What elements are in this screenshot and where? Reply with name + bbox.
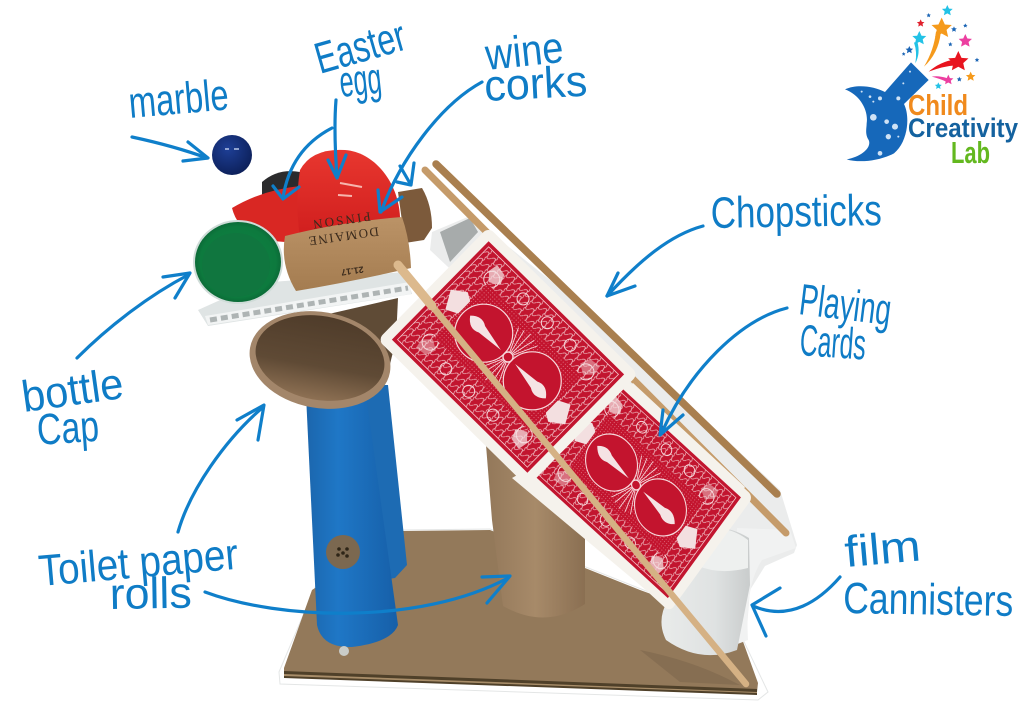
label: wine corks: corks <box>483 57 588 111</box>
blue tube: rear <box>350 385 407 582</box>
front chopstick <box>398 265 746 684</box>
front wine cork <box>284 208 411 291</box>
label: Chopsticks: Chopsticks <box>710 186 882 238</box>
front wine cork: PINSON <box>310 209 372 232</box>
arrow: Playing Cards <box>660 308 787 435</box>
label: bottle cap <box>19 359 126 455</box>
playing card: upper <box>378 227 638 487</box>
label: Toilet paper rolls <box>37 530 240 619</box>
label: Playing Cards: Playing <box>797 275 894 335</box>
label: Easter egg: egg <box>337 54 384 107</box>
front wine cork: DOMAINE <box>306 224 380 249</box>
label: Easter egg: Easter <box>309 11 411 84</box>
label: film Cannisters: film <box>843 522 923 577</box>
logo stars <box>902 5 979 89</box>
label: Toilet paper rolls: rolls <box>109 569 192 619</box>
arrows: wine corks <box>378 82 482 212</box>
logo flask <box>845 62 929 161</box>
cardboard base <box>279 529 768 700</box>
playing card: lower <box>512 358 753 612</box>
rear wine cork <box>398 188 432 243</box>
bottle cap <box>193 220 283 304</box>
arrow: bottle cap <box>77 273 190 358</box>
corrugated plastic shelf <box>198 272 412 326</box>
arrows: Easter egg <box>273 100 346 199</box>
marble <box>212 135 252 175</box>
arrows: Toilet paper rolls <box>178 405 510 613</box>
toilet paper roll: horizontal holder <box>242 298 398 420</box>
arrow: Chopsticks <box>607 226 703 296</box>
label: bottle cap: Cap <box>35 402 101 455</box>
label: Playing Cards: Cards <box>798 316 868 370</box>
label: Playing Cards <box>797 275 894 370</box>
label: wine corks <box>482 23 588 111</box>
logo: Child Creativity Lab <box>845 5 1018 170</box>
label: bottle cap: bottle <box>19 359 126 422</box>
arrow: marble <box>132 137 208 161</box>
label: marble: marble <box>127 70 230 128</box>
arrow: film Cannisters <box>752 577 840 636</box>
white plastic bracket <box>430 216 797 645</box>
label: wine corks: wine <box>482 23 566 80</box>
label: Toilet paper rolls: Toilet paper <box>37 530 240 596</box>
blue tube: front <box>306 395 398 656</box>
film cannister <box>661 527 750 655</box>
plastic easter egg <box>232 150 400 242</box>
rear chopsticks <box>425 164 786 533</box>
logo wordmark: Child: Child <box>908 90 968 122</box>
logo wordmark: Lab: Lab <box>951 135 990 170</box>
toilet paper roll: slanted support <box>486 445 585 618</box>
marble run model <box>193 135 797 700</box>
label: film Cannisters <box>843 522 1014 626</box>
front wine cork: 21.17 <box>341 264 364 277</box>
label: Easter egg <box>309 11 411 107</box>
